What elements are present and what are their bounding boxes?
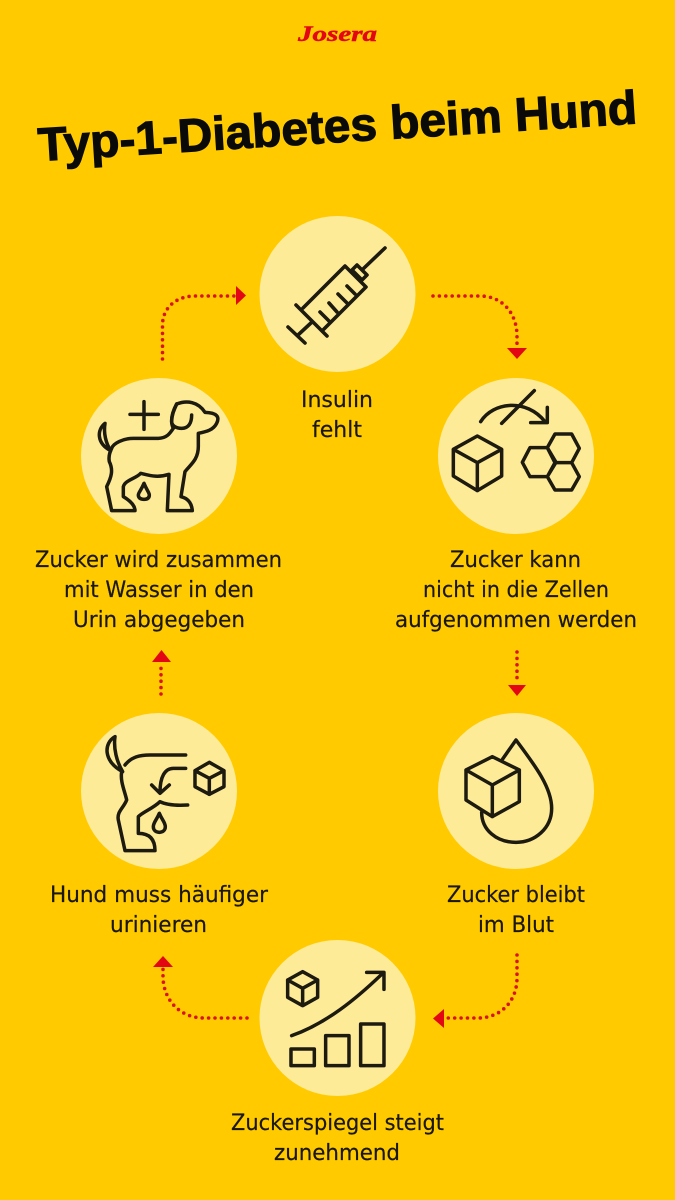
step 6 circle <box>81 378 237 534</box>
step 3: Zucker bleibt im Blut <box>438 713 594 938</box>
step 5 label: urinieren <box>110 913 207 938</box>
step 2 circle <box>438 378 594 534</box>
icon: cube, rising arrow and bars <box>288 972 384 1066</box>
step 6: Zucker wird mit Wasser abgegeben <box>35 378 282 633</box>
step 4 circle <box>260 940 416 1096</box>
step 4 label <box>231 1111 444 1166</box>
arrow: step 6 to step 1 <box>162 286 246 359</box>
step 3 label: Zucker bleibt <box>447 883 585 908</box>
step 3 label <box>447 883 585 938</box>
step 3 circle <box>438 713 594 869</box>
step 1 circle <box>260 216 416 372</box>
title: Typ-1-Diabetes beim Hund <box>36 80 638 171</box>
arrow: step 4 to step 5 <box>153 956 247 1018</box>
step 1 label: Insulin <box>301 388 373 413</box>
step 2 label: nicht in die Zellen <box>423 578 609 603</box>
step 1 label <box>301 388 373 443</box>
step 2: Zucker kann nicht aufgenommen werden <box>395 378 637 633</box>
logo: Josera: Josera <box>297 21 377 46</box>
arrow: step 3 to step 4 <box>433 955 517 1028</box>
step 2 label: aufgenommen werden <box>395 608 637 633</box>
step 6 label: Zucker wird zusammen <box>35 548 282 573</box>
icon: dog with plus and drop <box>99 402 218 511</box>
step 5 label <box>50 883 269 938</box>
step 4 label: zunehmend <box>274 1141 400 1166</box>
step 6 label: mit Wasser in den <box>64 578 254 603</box>
arrow: step 5 to step 6 <box>152 650 171 694</box>
step 6 label <box>35 548 282 633</box>
arrow: step 2 to step 3 <box>508 652 526 696</box>
icon: cube, blocked arrow and cells <box>453 391 579 491</box>
icon: cube in blood drop <box>466 740 552 842</box>
step 4: Zuckerspiegel steigt zunehmend <box>231 940 444 1166</box>
step 5 circle <box>81 713 237 869</box>
step 1 label: fehlt <box>312 418 362 443</box>
arrow: step 1 to step 2 <box>433 296 527 359</box>
step 5: Hund muss häufiger urinieren <box>50 713 269 938</box>
step 2 label <box>395 548 637 633</box>
step 6 label: Urin abgegeben <box>73 608 245 633</box>
step 1: Insulin fehlt <box>260 216 416 443</box>
step 5 label: Hund muss häufiger <box>50 883 269 908</box>
icon: syringe <box>288 248 385 343</box>
step 4 label: Zuckerspiegel steigt <box>231 1111 444 1136</box>
step 2 label: Zucker kann <box>450 548 581 573</box>
step 3 label: im Blut <box>478 913 554 938</box>
icon: dog hindquarters, cube and drop <box>107 737 224 851</box>
